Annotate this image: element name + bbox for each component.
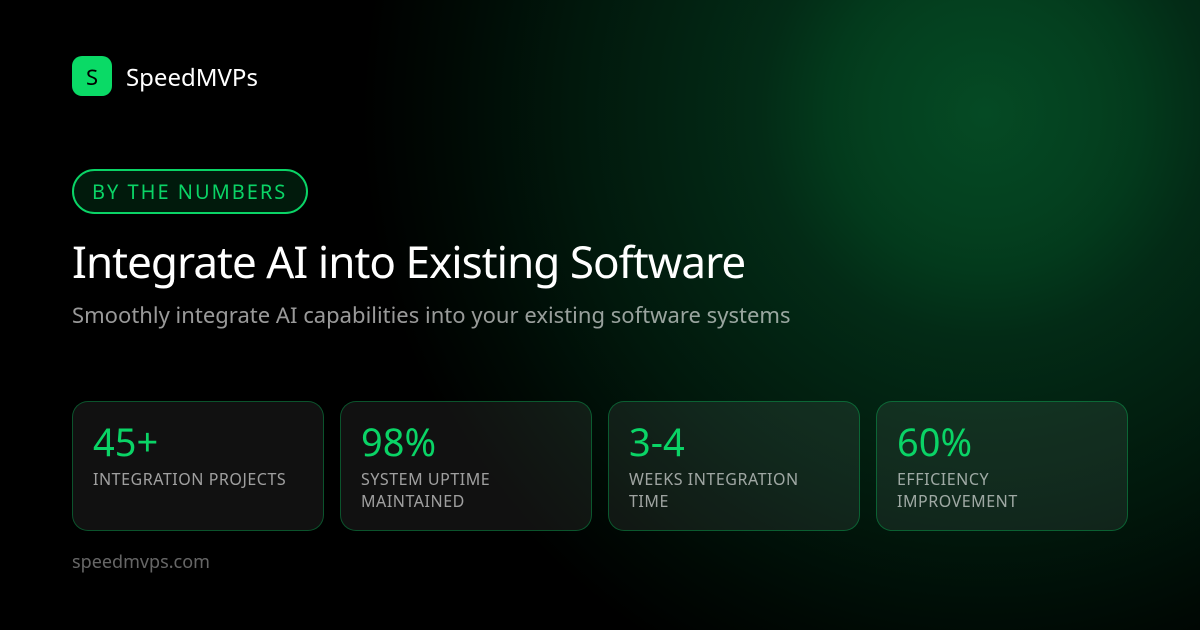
stat value: 98% — [361, 416, 436, 468]
icon: logo mark: S — [86, 62, 98, 92]
stat card: weeks integration time — [608, 401, 860, 531]
footer url: speedmvps.com — [72, 550, 210, 574]
stat label: MAINTAINED — [361, 490, 465, 512]
stat card: system uptime — [340, 401, 592, 531]
stat label: EFFICIENCY — [897, 468, 989, 490]
stat label: INTEGRATION PROJECTS — [93, 468, 286, 490]
stat value: 45+ — [93, 416, 158, 468]
stat label — [629, 468, 799, 512]
subtitle: Smoothly integrate AI capabilities into your existing software systems — [72, 300, 791, 330]
stat value: 60% — [897, 416, 972, 468]
stat card: integration projects — [72, 401, 324, 531]
stat label — [897, 468, 1018, 512]
stat card: efficiency improvement — [876, 401, 1128, 531]
icon: logo mark — [72, 56, 112, 96]
stat label: TIME — [629, 490, 669, 512]
logo — [72, 56, 258, 96]
brand name: SpeedMVPs — [126, 61, 258, 94]
stat value: 3-4 — [629, 416, 685, 468]
badge — [72, 169, 308, 214]
stat label: IMPROVEMENT — [897, 490, 1018, 512]
badge: BY THE NUMBERS — [92, 178, 287, 205]
title: Integrate AI into Existing Software — [72, 231, 745, 291]
stat label — [361, 468, 490, 512]
stat label: SYSTEM UPTIME — [361, 468, 490, 490]
stat label: WEEKS INTEGRATION — [629, 468, 799, 490]
